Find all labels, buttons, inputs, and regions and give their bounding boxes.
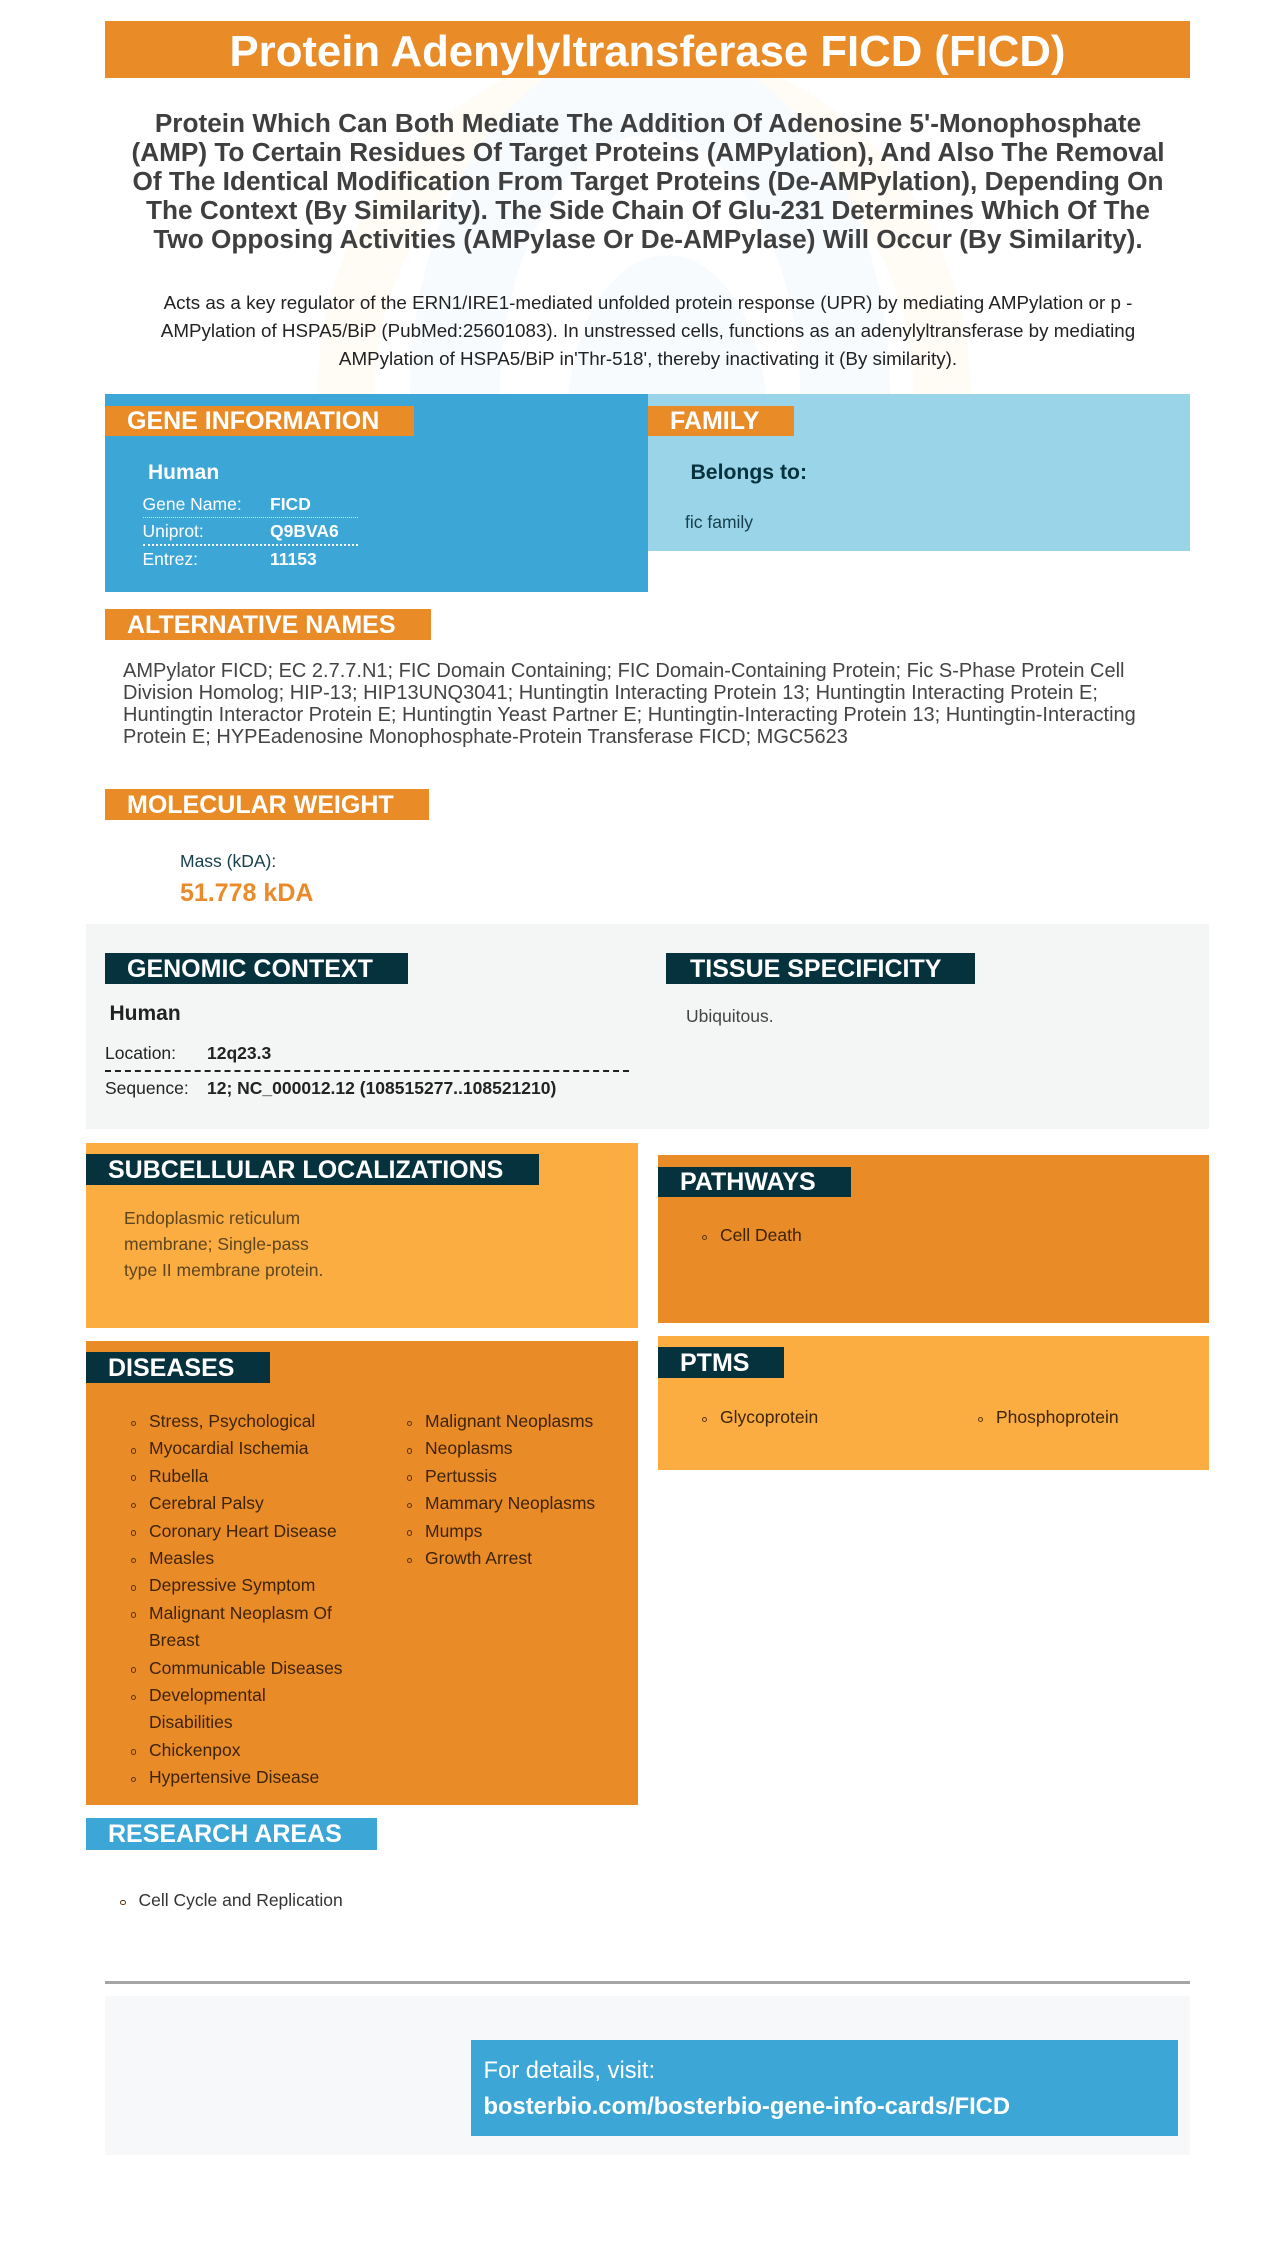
title xyxy=(105,21,1190,78)
entrez row: 11153 xyxy=(270,549,317,569)
background watermark logo xyxy=(318,78,970,394)
heading: ptms: PTMS xyxy=(680,1349,749,1377)
panel: footer xyxy=(105,1996,1190,2155)
localization text: type II membrane protein. xyxy=(124,1260,323,1280)
alternative names text: Division Homolog; HIP-13; HIP13UNQ3041; Huntingtin Interacting Protein 13; Huntingtin Interacting Protein E; xyxy=(123,682,1098,704)
panel: genomic context and tissue specificity xyxy=(86,924,1209,1129)
link url: bosterbio.com/bosterbio-gene-info-cards/FICD xyxy=(484,2093,1010,2120)
gene name row: Gene Name: xyxy=(142,494,242,514)
species label: Human xyxy=(148,461,219,484)
heading: tissue specificity: TISSUE SPECIFICITY xyxy=(690,955,941,983)
disease list column 1 xyxy=(131,1411,343,1787)
subtitle: Protein Which Can Both Mediate The Addition Of Adenosine 5'-Monophosphate xyxy=(155,108,1141,138)
panel: diseases xyxy=(86,1341,638,1805)
disease list column 1: Coronary Heart Disease xyxy=(149,1521,337,1541)
gene name row xyxy=(142,491,358,518)
disease list column 2: Growth Arrest xyxy=(425,1548,532,1568)
alternative names text: AMPylator FICD; EC 2.7.7.N1; FIC Domain Containing; FIC Domain-Containing Protein; Fic S-Phase Protein Cell xyxy=(123,660,1124,682)
disease list column 2: Malignant Neoplasms xyxy=(425,1411,593,1431)
title: Protein Adenylyltransferase FICD (FICD) xyxy=(230,27,1065,76)
callout: details link xyxy=(471,2040,1178,2136)
mass label: Mass (kDA): xyxy=(180,851,276,871)
heading: alternative names: ALTERNATIVE NAMES xyxy=(127,611,396,639)
subtitle: Of The Identical Modification From Target Proteins (De-AMPylation), Depending On xyxy=(132,166,1164,196)
heading: diseases xyxy=(86,1352,270,1383)
panel: genomic context and tissue specificity: 12q23.3 xyxy=(207,1043,271,1063)
disease list column 1: Rubella xyxy=(149,1466,208,1486)
gene name row: FICD xyxy=(270,494,311,514)
location row: Location: xyxy=(105,1043,176,1063)
subtitle: The Context (By Similarity). The Side Chain Of Glu-231 Determines Which Of The xyxy=(146,195,1150,225)
subtitle: (AMP) To Certain Residues Of Target Proteins (AMPylation), And Also The Removal xyxy=(131,137,1165,167)
alternative names text xyxy=(123,660,1136,748)
panel: pathways xyxy=(658,1155,1209,1323)
belongs to label: Belongs to: xyxy=(690,461,807,484)
footer divider xyxy=(105,1981,1190,1984)
heading: molecular weight: MOLECULAR WEIGHT xyxy=(127,791,394,819)
disease list column 2 xyxy=(407,1411,595,1568)
heading: family xyxy=(648,406,794,436)
ptm list column 1: Glycoprotein xyxy=(720,1407,818,1427)
family value: fic family xyxy=(685,512,753,532)
disease list column 2: Neoplasms xyxy=(425,1438,513,1458)
pathways list: Cell Death xyxy=(720,1225,802,1245)
species label: Human xyxy=(110,1002,181,1025)
alternative names text: Protein E; HYPEadenosine Monophosphate-Protein Transferase FICD; MGC5623 xyxy=(123,726,848,748)
uniprot row: Q9BVA6 xyxy=(270,521,339,541)
panel: genomic context and tissue specificity: 12; NC_000012.12 (108515277..108521210) xyxy=(207,1078,556,1098)
disease list column 2: Mammary Neoplasms xyxy=(425,1493,595,1513)
disease list column 1: Developmental xyxy=(149,1685,266,1705)
entrez row: Entrez: xyxy=(142,549,198,569)
research areas list: Cell Cycle and Replication xyxy=(138,1890,343,1910)
disease list column 2: Pertussis xyxy=(425,1466,497,1486)
sequence row: Sequence: xyxy=(105,1078,189,1098)
panel: family xyxy=(648,394,1190,551)
ptm list column 2: Phosphoprotein xyxy=(996,1407,1119,1427)
disease list column 1: Breast xyxy=(149,1630,200,1650)
heading: pathways xyxy=(658,1167,851,1197)
function description: AMPylation of HSPA5/BiP (PubMed:25601083). In unstressed cells, functions as an adenylyltransferase by mediating xyxy=(161,320,1135,341)
heading: subcellular localizations: SUBCELLULAR LOCALIZATIONS xyxy=(108,1156,503,1184)
function description: Acts as a key regulator of the ERN1/IRE1-mediated unfolded protein response (UPR) by mediating AMPylation or p - xyxy=(164,292,1132,313)
localization text xyxy=(124,1208,323,1280)
heading: research areas: RESEARCH AREAS xyxy=(108,1820,342,1848)
subtitle: Two Opposing Activities (AMPylase Or De-AMPylase) Will Occur (By Similarity). xyxy=(153,224,1143,254)
disease list column 1: Stress, Psychological xyxy=(149,1411,315,1431)
sequence row xyxy=(105,1078,556,1098)
heading: gene information: GENE INFORMATION xyxy=(127,407,379,435)
function description: AMPylation of HSPA5/BiP in'Thr-518', thereby inactivating it (By similarity). xyxy=(339,348,957,369)
disease list column 2: Mumps xyxy=(425,1521,482,1541)
disease list column 1: Malignant Neoplasm Of xyxy=(149,1603,332,1623)
disease list column 1: Measles xyxy=(149,1548,214,1568)
mass value: 51.778 kDA xyxy=(180,878,313,906)
disease list column 1: Cerebral Palsy xyxy=(149,1493,264,1513)
panel: gene information xyxy=(105,394,648,592)
entrez row xyxy=(142,549,317,569)
uniprot row xyxy=(142,518,358,546)
panel: subcellular localizations xyxy=(86,1143,638,1328)
tissue specificity text: Ubiquitous. xyxy=(686,1006,774,1026)
disease list column 1: Hypertensive Disease xyxy=(149,1767,319,1787)
disease list column 1: Disabilities xyxy=(149,1712,233,1732)
heading: family: FAMILY xyxy=(670,407,759,435)
alternative names text: Huntingtin Interactor Protein E; Huntingtin Yeast Partner E; Huntingtin-Interacting Protein 13; Huntingtin-Interacting xyxy=(123,704,1136,726)
disease list column 1: Myocardial Ischemia xyxy=(149,1438,308,1458)
uniprot row: Uniprot: xyxy=(142,521,204,541)
heading: diseases: DISEASES xyxy=(108,1354,234,1382)
localization text: Endoplasmic reticulum xyxy=(124,1208,300,1228)
location row xyxy=(105,1043,271,1063)
link label: For details, visit: xyxy=(484,2057,655,2084)
disease list column 1: Communicable Diseases xyxy=(149,1658,343,1678)
heading: ptms xyxy=(658,1347,784,1378)
heading: pathways: PATHWAYS xyxy=(680,1168,816,1196)
subtitle xyxy=(131,108,1165,254)
dashed divider xyxy=(105,1070,629,1072)
function description xyxy=(160,292,1135,369)
panel: ptms xyxy=(658,1336,1209,1470)
localization text: membrane; Single-pass xyxy=(124,1234,309,1254)
disease list column 1: Chickenpox xyxy=(149,1740,240,1760)
heading: genomic context: GENOMIC CONTEXT xyxy=(127,955,373,983)
disease list column 1: Depressive Symptom xyxy=(149,1575,315,1595)
